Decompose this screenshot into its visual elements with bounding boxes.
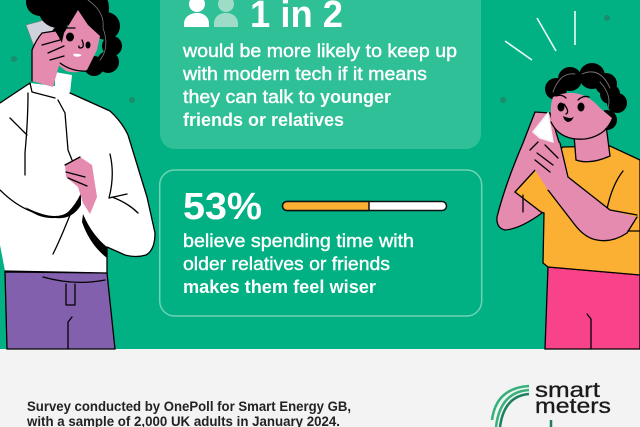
sound rays xyxy=(505,11,575,60)
text block: survey note: Survey conducted by OnePoll for Smart Energy GB, xyxy=(27,399,351,414)
shirt xyxy=(0,72,155,273)
text block: feel wiser: older relatives or friends xyxy=(183,254,390,274)
trousers xyxy=(545,267,640,349)
text block: feel wiser: believe spending time with xyxy=(183,231,414,251)
background dots xyxy=(11,15,610,103)
trousers xyxy=(5,272,115,349)
progress bar xyxy=(282,202,446,210)
text block: feel wiser xyxy=(183,231,414,297)
face xyxy=(57,10,100,72)
text block: younger friends: with modern tech if it means xyxy=(182,64,427,84)
hand with phone xyxy=(533,113,553,142)
T-shirt xyxy=(515,146,640,275)
neck xyxy=(574,125,610,162)
panel: 1 in 2 xyxy=(160,0,481,149)
head xyxy=(551,93,612,139)
raised arm xyxy=(497,112,560,230)
text block: younger friends: they can talk to xyxy=(183,87,315,107)
text block: younger friends: would be more likely to keep up xyxy=(182,41,457,61)
raised hand xyxy=(32,31,65,87)
text block: survey note xyxy=(26,399,351,427)
text block: younger friends xyxy=(182,41,457,130)
text block: younger friends: friends or relatives xyxy=(183,110,344,130)
logo arcs xyxy=(492,386,529,420)
face features xyxy=(558,102,564,112)
logo: smart meters xyxy=(492,379,611,427)
logo: smart meters: meters xyxy=(535,395,611,418)
forearm xyxy=(548,177,637,241)
hair xyxy=(545,63,627,130)
panel: 53% xyxy=(160,170,482,316)
illustration: left person on phone xyxy=(0,0,155,349)
text block: younger friends: younger xyxy=(320,87,391,107)
illustration: right person on phone xyxy=(497,11,640,349)
text block: feel wiser: makes them feel wiser xyxy=(183,277,376,297)
heading: 53%: 53% xyxy=(183,186,262,228)
hair xyxy=(26,0,122,76)
lower hand xyxy=(65,157,97,214)
arm shadows xyxy=(25,193,107,258)
footer band xyxy=(0,349,640,427)
icon: two people xyxy=(184,0,238,27)
logo wordmark: smart xyxy=(535,379,600,402)
phone xyxy=(26,18,64,68)
